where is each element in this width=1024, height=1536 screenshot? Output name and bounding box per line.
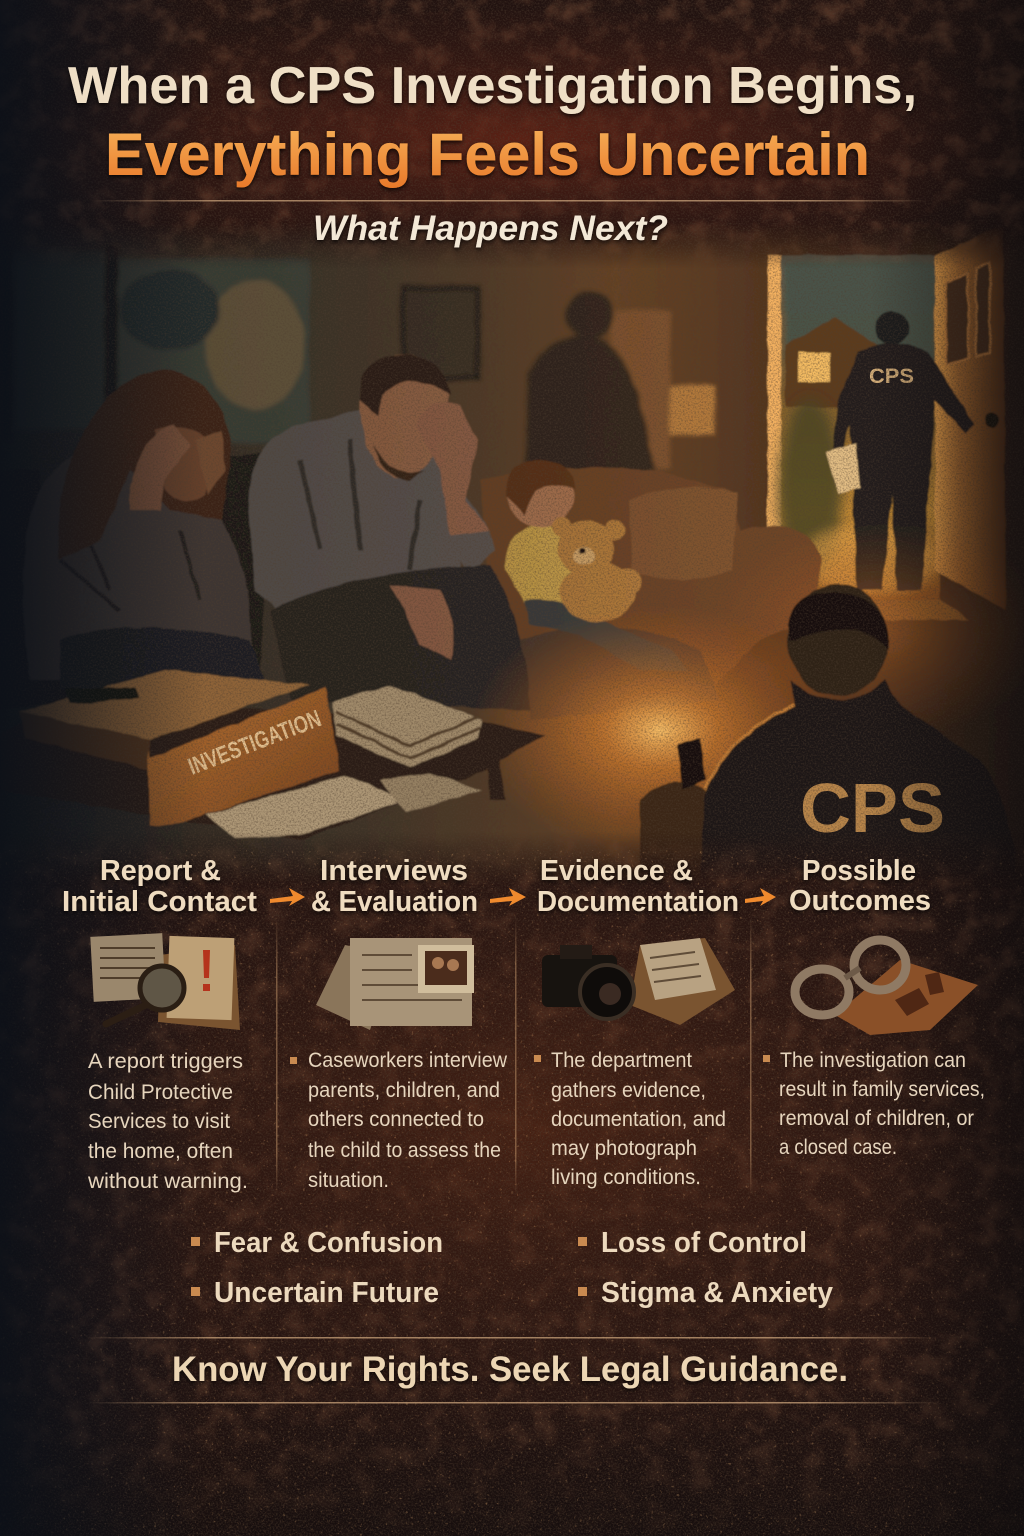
stack of folders bbox=[20, 670, 310, 770]
investigation box bbox=[148, 688, 340, 826]
description: a closed case. bbox=[779, 1136, 897, 1159]
heading: Interviews bbox=[320, 855, 468, 887]
column 2: interviews and evaluation bbox=[290, 855, 508, 1192]
label: CPS on jacket: CPS bbox=[800, 769, 945, 847]
description bbox=[87, 1050, 248, 1193]
description: Services to visit bbox=[88, 1110, 230, 1133]
description: parents, children, and bbox=[308, 1079, 500, 1102]
heading: Outcomes bbox=[789, 885, 931, 917]
foreground CPS officer bbox=[640, 584, 1018, 880]
description bbox=[763, 1049, 985, 1159]
icon: papers and magnifying glass bbox=[90, 933, 240, 1030]
description: situation. bbox=[308, 1169, 389, 1192]
column 4: possible outcomes bbox=[763, 855, 985, 1159]
arrow 1 bbox=[270, 888, 305, 906]
icon: camera and documents bbox=[542, 938, 735, 1025]
description: others connected to bbox=[308, 1108, 484, 1131]
room wall bbox=[0, 222, 1024, 885]
column 3: evidence and documentation bbox=[534, 855, 739, 1189]
column dividers bbox=[276, 915, 752, 1195]
column 1: report and initial contact bbox=[62, 855, 257, 1193]
heading: Possible bbox=[802, 855, 916, 887]
description: Caseworkers interview bbox=[308, 1049, 508, 1072]
heading bbox=[311, 855, 478, 918]
ember speckles bbox=[0, 850, 1024, 1536]
left dark sofa bbox=[222, 452, 264, 666]
warm floor glow bbox=[483, 616, 825, 842]
woman with head in hands bbox=[23, 370, 265, 690]
description: gathers evidence, bbox=[551, 1079, 706, 1102]
open doorway bbox=[765, 232, 1006, 622]
description: the home, often bbox=[88, 1140, 233, 1163]
description: removal of children, or bbox=[779, 1107, 974, 1130]
emotional impact list: Stigma & Anxiety bbox=[601, 1277, 833, 1309]
description: Child Protective bbox=[88, 1081, 233, 1104]
description bbox=[290, 1049, 508, 1192]
window at left bbox=[106, 254, 310, 444]
description: the child to assess the bbox=[308, 1139, 501, 1162]
man with hand on forehead bbox=[248, 355, 530, 710]
icon: case files and photo bbox=[316, 938, 474, 1030]
emotional impact list: Loss of Control bbox=[601, 1227, 807, 1259]
description: The department bbox=[551, 1049, 692, 1072]
label: investigation box text: INVESTIGATION bbox=[184, 705, 325, 781]
scene shading bbox=[87, 254, 635, 848]
heading bbox=[537, 855, 739, 918]
heading: Report & bbox=[100, 855, 221, 887]
heading bbox=[789, 855, 931, 917]
label: CPS on doorway worker's back: CPS bbox=[869, 365, 914, 388]
footer call to action: Know Your Rights. Seek Legal Guidance. bbox=[172, 1350, 848, 1389]
description: living conditions. bbox=[551, 1166, 701, 1189]
background figure examining wall bbox=[525, 291, 715, 480]
heading: Documentation bbox=[537, 886, 739, 918]
subtitle: What Happens Next? bbox=[313, 209, 668, 248]
title line 1: When a CPS Investigation Begins, bbox=[68, 57, 917, 115]
illustration: family home scene bbox=[0, 222, 1024, 885]
teddy bear bbox=[552, 517, 642, 622]
heading bbox=[62, 855, 257, 918]
title line 2: Everything Feels Uncertain bbox=[105, 121, 870, 188]
heading: Evidence & bbox=[540, 855, 693, 887]
description: without warning. bbox=[87, 1170, 248, 1193]
heading: Initial Contact bbox=[62, 886, 257, 918]
description: A report triggers bbox=[88, 1050, 243, 1073]
emotional impact list: Fear & Confusion bbox=[214, 1227, 443, 1259]
description: The investigation can bbox=[780, 1049, 966, 1072]
icon: handcuffs bbox=[795, 940, 978, 1035]
door leaf bbox=[935, 225, 1006, 610]
description bbox=[534, 1049, 726, 1189]
CPS worker in doorway bbox=[826, 311, 975, 590]
arrow 2 bbox=[490, 888, 526, 906]
paper stacks bbox=[205, 685, 482, 838]
title rule bbox=[90, 200, 930, 202]
emotional impact list bbox=[191, 1227, 833, 1309]
child with teddy bear bbox=[505, 460, 690, 670]
heading: & Evaluation bbox=[311, 886, 478, 918]
title block bbox=[68, 57, 930, 248]
right sofa bbox=[480, 468, 822, 720]
description: documentation, and bbox=[551, 1108, 726, 1131]
emotional impact list: Uncertain Future bbox=[214, 1277, 439, 1309]
wall picture frame bbox=[403, 288, 478, 378]
table bbox=[130, 708, 546, 840]
description: result in family services, bbox=[779, 1078, 985, 1101]
arrow 3 bbox=[745, 888, 776, 906]
description: may photograph bbox=[551, 1137, 697, 1160]
